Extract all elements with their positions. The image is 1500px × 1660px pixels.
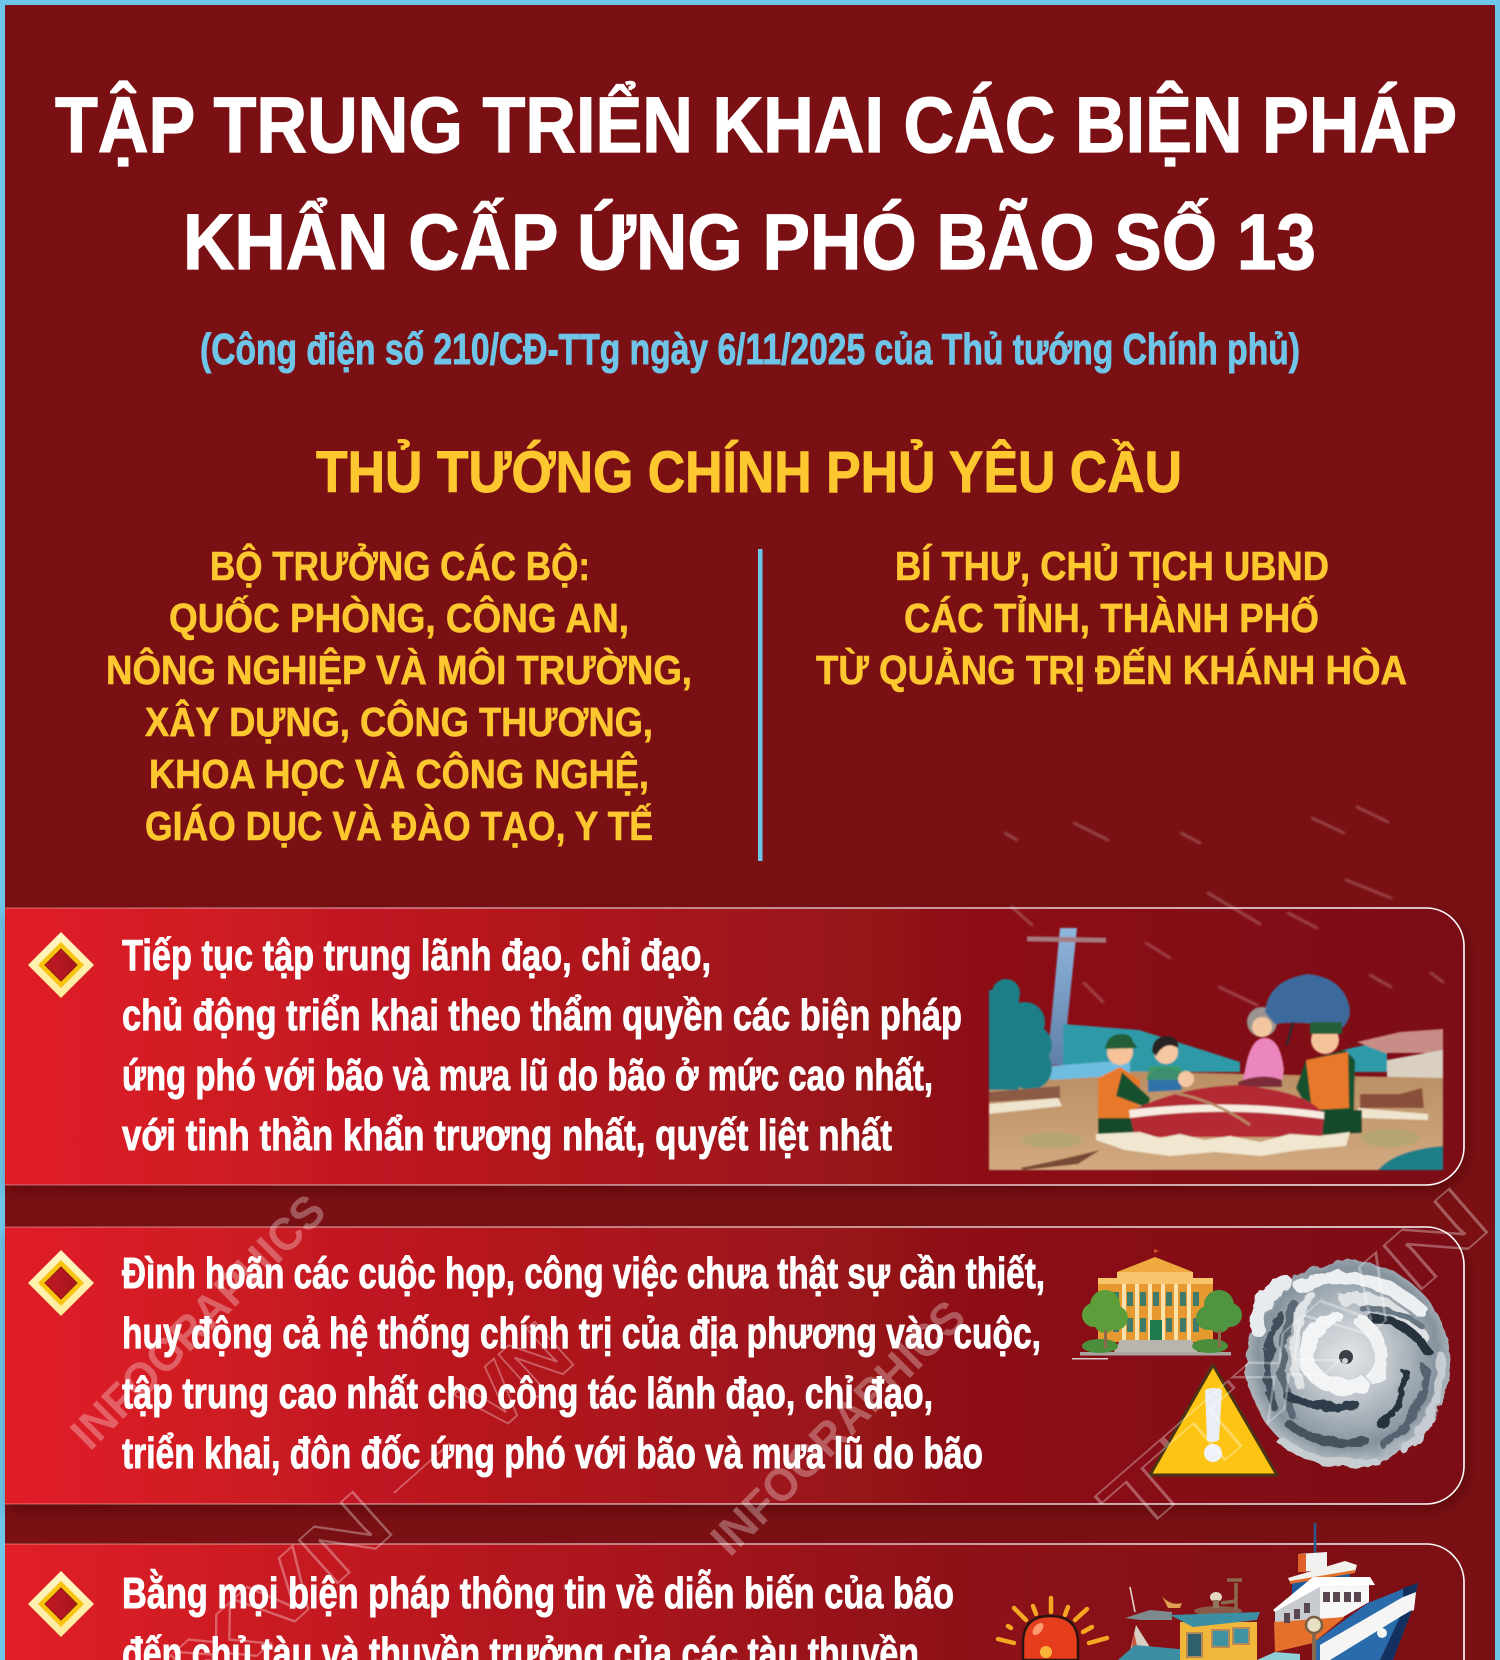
icon: diamond bullet <box>28 1250 94 1316</box>
title <box>55 80 1457 286</box>
text block: ministers: KHOA HỌC VÀ CÔNG NGHỆ, <box>149 751 649 797</box>
icon: ship <box>1273 1523 1418 1660</box>
woman and child <box>1146 1036 1194 1092</box>
text block: ministers: XÂY DỰNG, CÔNG THƯƠNG, <box>145 699 653 745</box>
text block: ministers: NÔNG NGHIỆP VÀ MÔI TRƯỜNG, <box>106 647 692 693</box>
panel 1 text: với tinh thần khẩn trương nhất, quyết liệt nhất <box>122 1111 892 1160</box>
panel 3 text <box>122 1568 954 1660</box>
watermark: TTXVN outline: VN <box>441 1305 590 1451</box>
icon: siren <box>998 1598 1107 1660</box>
icon: warning triangle <box>1150 1365 1277 1475</box>
rubber boat <box>1096 1085 1350 1156</box>
watermark: TTXVN outline <box>49 1169 1500 1660</box>
text block: ministers: BỘ TRƯỞNG CÁC BỘ: <box>210 543 590 589</box>
left soldier <box>1098 1034 1150 1134</box>
text block: provincial leaders: CÁC TỈNH, THÀNH PHỐ <box>904 595 1319 641</box>
panel 2 text: tập trung cao nhất cho công tác lãnh đạo, chỉ đạo, <box>122 1369 933 1418</box>
icon: fishing boat <box>1118 1580 1300 1660</box>
panel 1 text: chủ động triển khai theo thẩm quyền các biện pháp <box>122 991 962 1040</box>
panel 1 text: Tiếp tục tập trung lãnh đạo, chỉ đạo, <box>122 931 711 980</box>
watermark: TTXVN outline: TTXVN <box>1082 1169 1500 1555</box>
panel 2 text: huy động cả hệ thống chính trị của địa phương vào cuộc, <box>122 1309 1041 1358</box>
title: KHẨN CẤP ỨNG PHÓ BÃO SỐ 13 <box>183 197 1316 286</box>
icon: typhoon <box>1246 1261 1450 1465</box>
text block: provincial leaders <box>816 543 1407 693</box>
watermark: infographics: INFOGRAPHICS <box>700 1290 975 1565</box>
text block: ministers: GIÁO DỤC VÀ ĐÀO TẠO, Y TẾ <box>145 803 653 849</box>
illustration: flood rescue boat <box>989 928 1443 1170</box>
icon: diamond bullet <box>28 932 94 998</box>
text block: ministers <box>106 543 692 849</box>
panel 2 text: Đình hoãn các cuộc họp, công việc chưa thật sự cần thiết, <box>122 1249 1045 1298</box>
column divider <box>758 549 762 861</box>
heading: prime minister requests: THỦ TƯỚNG CHÍNH PHỦ YÊU CẦU <box>316 440 1182 505</box>
right soldier <box>1296 1022 1362 1135</box>
text block: ministers: QUỐC PHÒNG, CÔNG AN, <box>169 595 629 641</box>
panel 2: postpone meetings <box>5 1227 1464 1504</box>
panel 1 text <box>122 931 962 1160</box>
panel 2 text: triển khai, đôn đốc ứng phó với bão và mưa lũ do bão <box>122 1429 983 1478</box>
panel 1: leadership <box>5 908 1464 1185</box>
rain streaks <box>1005 807 1443 1005</box>
panel 3 text: Bằng mọi biện pháp thông tin về diễn biến của bão <box>122 1568 954 1618</box>
panel 3: storm information <box>5 1523 1464 1660</box>
icon: diamond bullet <box>28 1571 94 1637</box>
text block: provincial leaders: BÍ THƯ, CHỦ TỊCH UBND <box>895 543 1329 589</box>
elderly woman with umbrella <box>1238 974 1350 1087</box>
watermark: infographics <box>60 1184 975 1565</box>
panel 2 text <box>122 1249 1045 1478</box>
icon: government building <box>1072 1249 1242 1360</box>
text block: provincial leaders: TỪ QUẢNG TRỊ ĐẾN KHÁNH HÒA <box>816 647 1407 693</box>
panel 1 text: ứng phó với bão và mưa lũ do bão ở mức cao nhất, <box>122 1051 933 1100</box>
watermark: infographics: INFOGRAPHICS <box>60 1184 335 1459</box>
